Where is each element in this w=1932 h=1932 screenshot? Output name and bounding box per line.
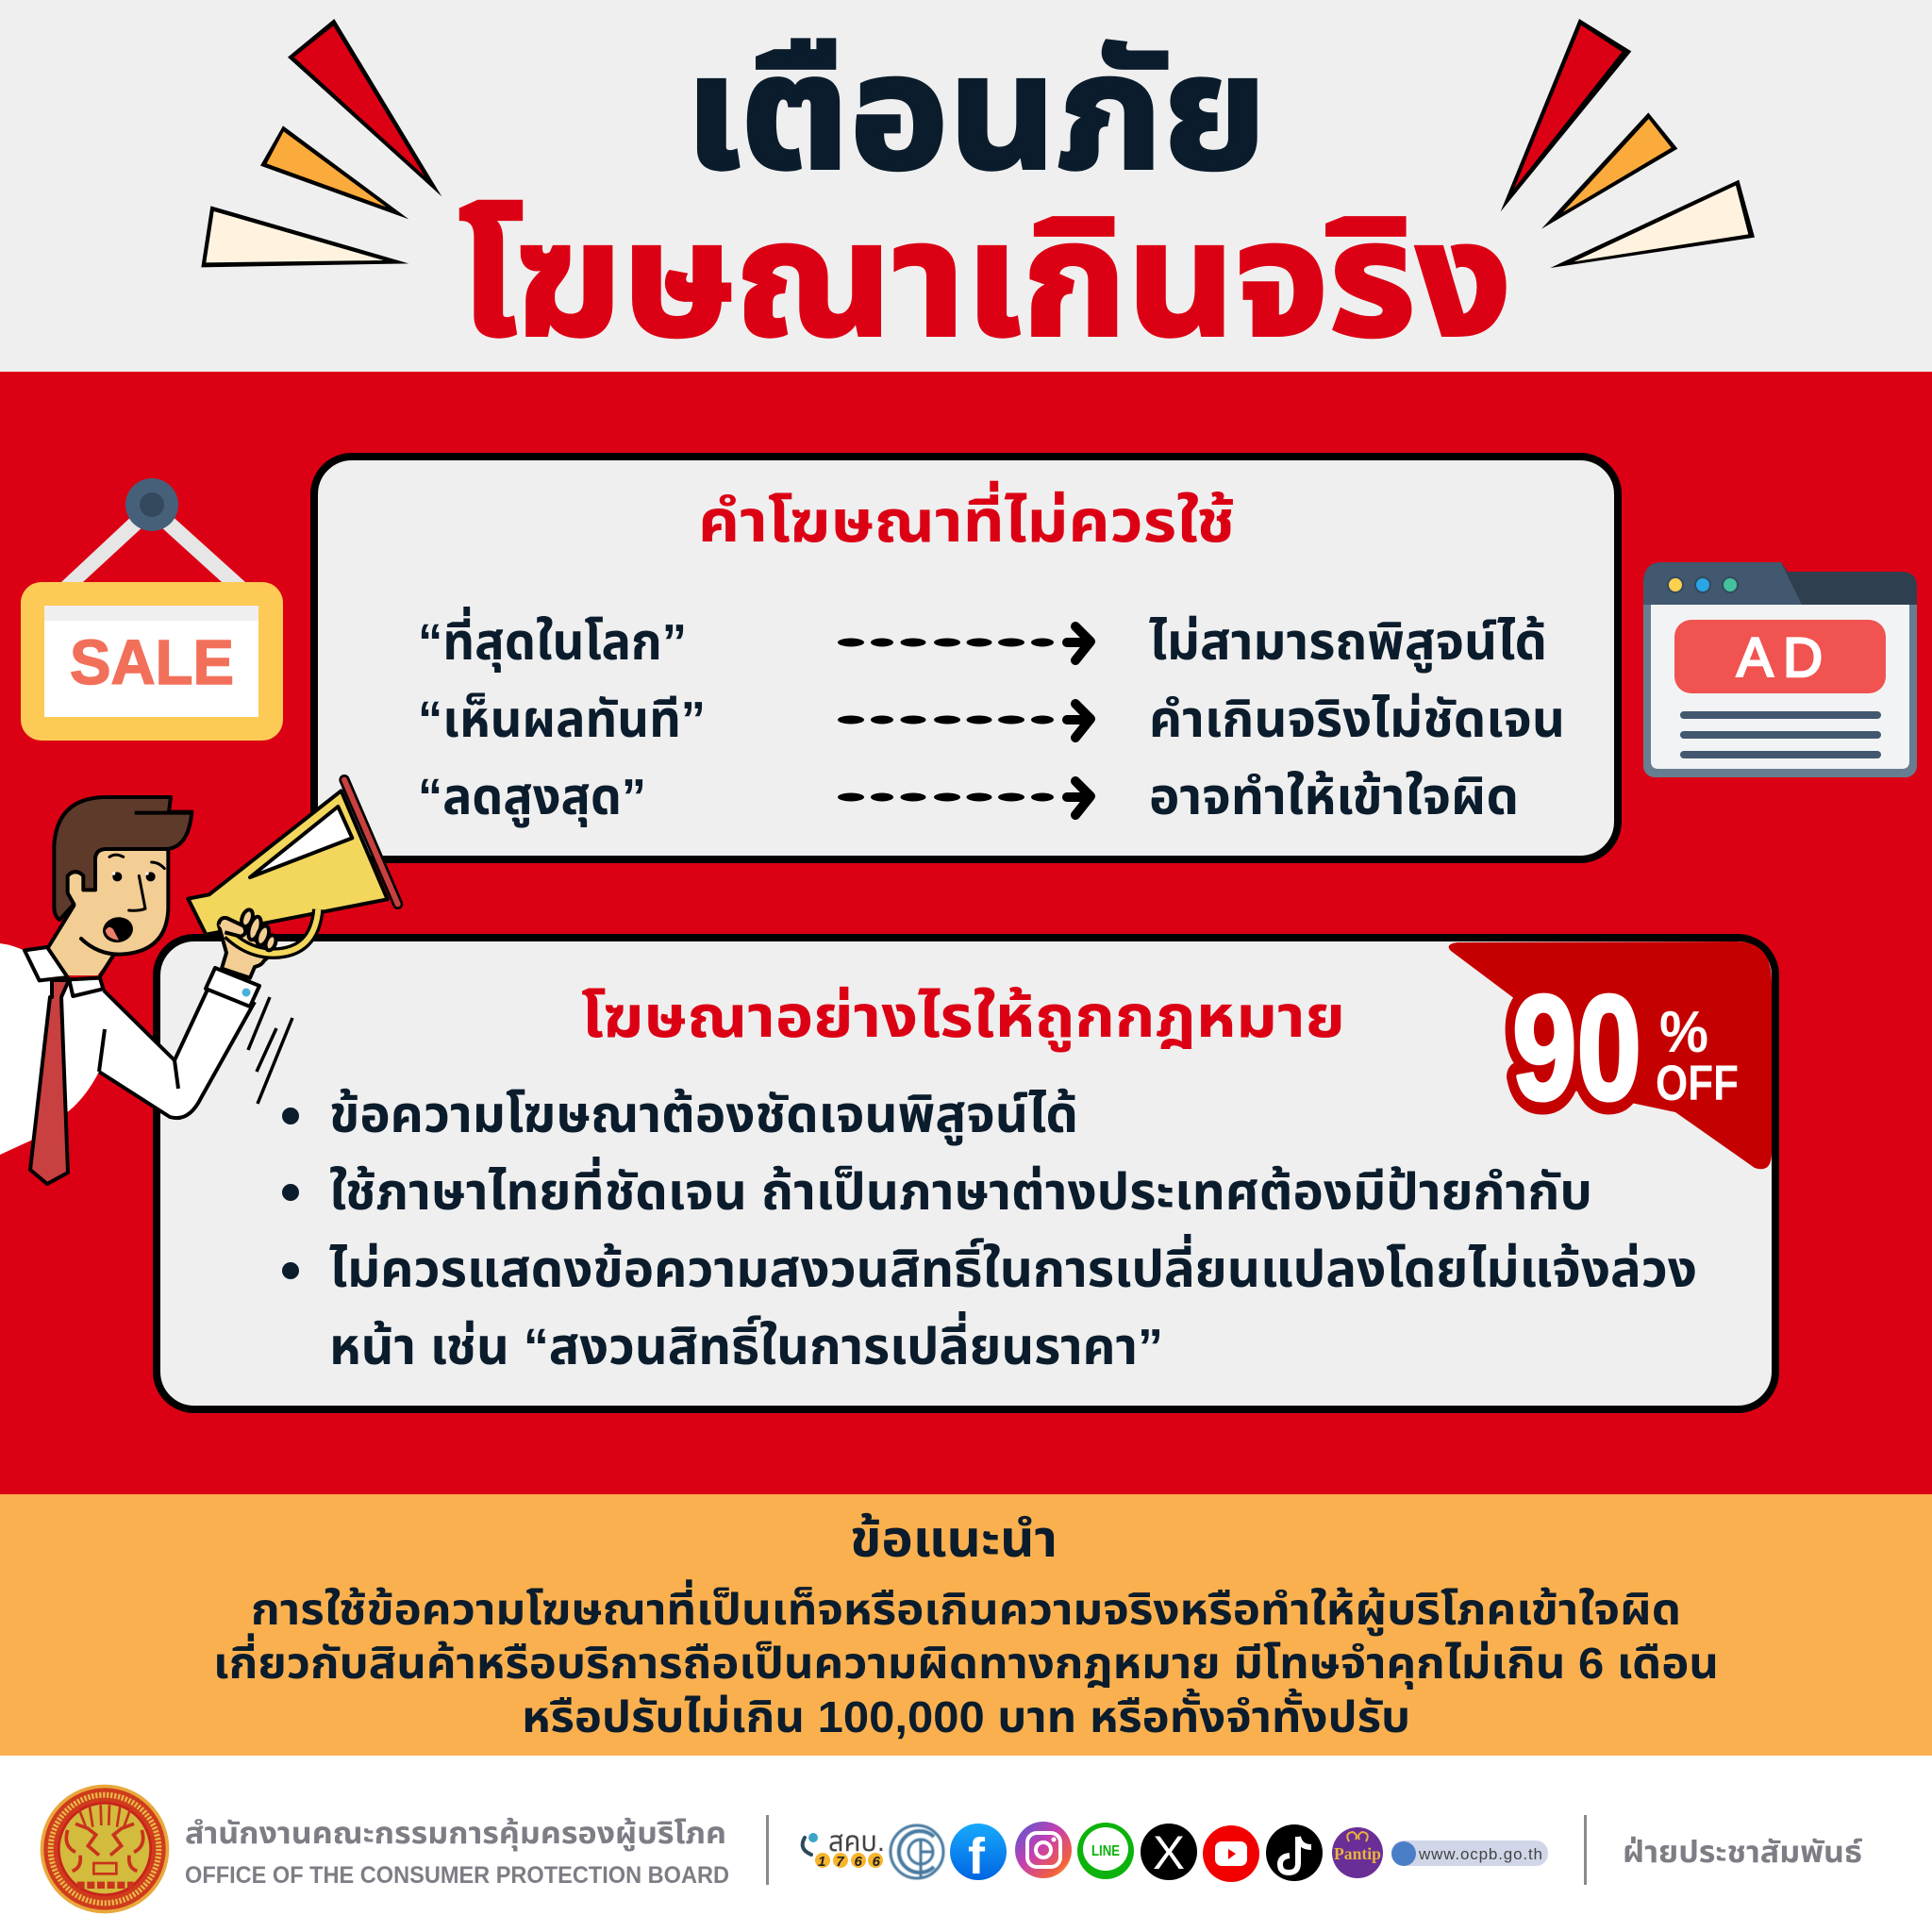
- fingers: [240, 908, 278, 952]
- logo: hotline 1766: 1766: [818, 1854, 881, 1870]
- title line 1: เตือนภัย: [685, 24, 1267, 203]
- bullet list: หน้า เช่น “สงวนสิทธิ์ในการเปลี่ยนราคา”: [329, 1311, 1163, 1375]
- row 2: [418, 691, 1565, 748]
- bullet list: ไม่ควรแสดงข้อความสงวนสิทธิ์ในการเปลี่ยนแปลงโดยไม่แจ้งล่วง: [329, 1234, 1697, 1298]
- row 1: [418, 607, 1547, 673]
- advice body text: [213, 1579, 1719, 1741]
- icon: facebook: [950, 1824, 1007, 1885]
- row 1: ไม่สามารถพิสูจน์ได้: [1149, 614, 1547, 673]
- megaphone rim: [344, 780, 398, 904]
- icon: browser window ad: AD: [1737, 627, 1823, 689]
- 90 percent off badge: 90: [1512, 965, 1641, 1131]
- icon: pantip: Pantip: [1334, 1844, 1381, 1863]
- face features: [101, 855, 164, 945]
- icon: browser window ad: [1643, 562, 1917, 777]
- megaphone and hand: [188, 780, 398, 978]
- advice body text: หรือปรับไม่เกิน 100,000 บาท หรือทั้งจำทั้งปรับ: [522, 1689, 1410, 1741]
- decorative burst right: [1501, 19, 1755, 268]
- 90 percent off badge: %: [1659, 1000, 1708, 1065]
- icon: hanging sale sign: SALE: [70, 627, 234, 698]
- megaphone body: [188, 791, 388, 935]
- bullet list: [282, 1087, 1697, 1375]
- icon: x: X: [1153, 1826, 1185, 1879]
- thumb: [219, 918, 245, 937]
- row 2: “เห็นผลทันที”: [418, 691, 706, 748]
- icon: youtube: [1203, 1825, 1259, 1882]
- title line 2: โฆษณาเกินจริง: [458, 191, 1511, 370]
- icon: hanging sale sign: [21, 478, 283, 741]
- icon: tiktok: [1266, 1824, 1323, 1881]
- motion lines: [248, 997, 292, 1104]
- advice section: [213, 1511, 1719, 1741]
- decorative burst left: [201, 19, 441, 267]
- shirt cuff: [206, 968, 259, 1007]
- row 3: อาจทำให้เข้าใจผิด: [1149, 769, 1519, 825]
- footer: OFFICE OF THE CONSUMER PROTECTION BOARD: [185, 1862, 729, 1889]
- illustration: man with megaphone: [0, 780, 398, 1184]
- row 3: [418, 769, 1519, 827]
- megaphone highlight: [250, 807, 352, 877]
- 90 percent off badge: OFF: [1656, 1056, 1739, 1111]
- logo: OCPB seal: [41, 1785, 169, 1913]
- row 3: “ลดสูงสุด”: [418, 769, 646, 827]
- advice body text: เกี่ยวกับสินค้าหรือบริการถือเป็นความผิดทางกฎหมาย มีโทษจำคุกไม่เกิน 6 เดือน: [213, 1633, 1719, 1690]
- department name: ฝ่ายประชาสัมพันธ์: [1623, 1835, 1863, 1869]
- tie: [30, 980, 69, 1184]
- hair: [54, 797, 192, 920]
- logo: hotline 1766: สคบ.: [828, 1826, 885, 1857]
- icon: line: [1077, 1823, 1134, 1879]
- icon: cpb emblem: [891, 1825, 943, 1878]
- icon: pantip: [1332, 1827, 1383, 1878]
- bullet list: ใช้ภาษาไทยที่ชัดเจน ถ้าเป็นภาษาต่างประเทศต้องมีป้ายกำกับ: [329, 1157, 1592, 1221]
- cuff button: [242, 989, 251, 996]
- palm: [219, 918, 276, 978]
- advice heading: ข้อแนะนำ: [850, 1511, 1058, 1568]
- icon: x: [1141, 1824, 1197, 1880]
- panel: how to advertise legally: [157, 938, 1775, 1409]
- icon: instagram: [1015, 1822, 1072, 1878]
- website pill: www.ocpb.go.th: [1418, 1845, 1542, 1863]
- shirt: [0, 943, 259, 1155]
- row 2: คำเกินจริงไม่ชัดเจน: [1149, 691, 1565, 748]
- footer: [41, 1785, 1863, 1913]
- bullet list: ข้อความโฆษณาต้องชัดเจนพิสูจน์ได้: [329, 1087, 1078, 1145]
- website pill: [1391, 1840, 1548, 1866]
- head: [49, 797, 192, 975]
- agency name: สำนักงานคณะกรรมการคุ้มครองผู้บริโภค: [185, 1816, 726, 1851]
- heading: legal advertising: โฆษณาอย่างไรให้ถูกกฎหมาย: [581, 985, 1345, 1053]
- discount ribbon: [1449, 941, 1772, 1169]
- icon: line: LINE: [1091, 1843, 1120, 1859]
- megaphone handle: [228, 909, 318, 954]
- 90 percent off badge: 90: [1512, 965, 1641, 1131]
- logo: hotline 1766: [803, 1826, 885, 1870]
- advice body text: การใช้ข้อความโฆษณาที่เป็นเท็จหรือเกินความจริงหรือทำให้ผู้บริโภคเข้าใจผิด: [251, 1579, 1681, 1636]
- collar: [25, 947, 103, 996]
- panel: words not to use: [314, 457, 1618, 859]
- row 1: “ที่สุดในโลก”: [418, 607, 687, 673]
- icon: facebook: f: [968, 1828, 986, 1885]
- heading: words not to use: คำโฆษณาที่ไม่ควรใช้: [698, 480, 1235, 555]
